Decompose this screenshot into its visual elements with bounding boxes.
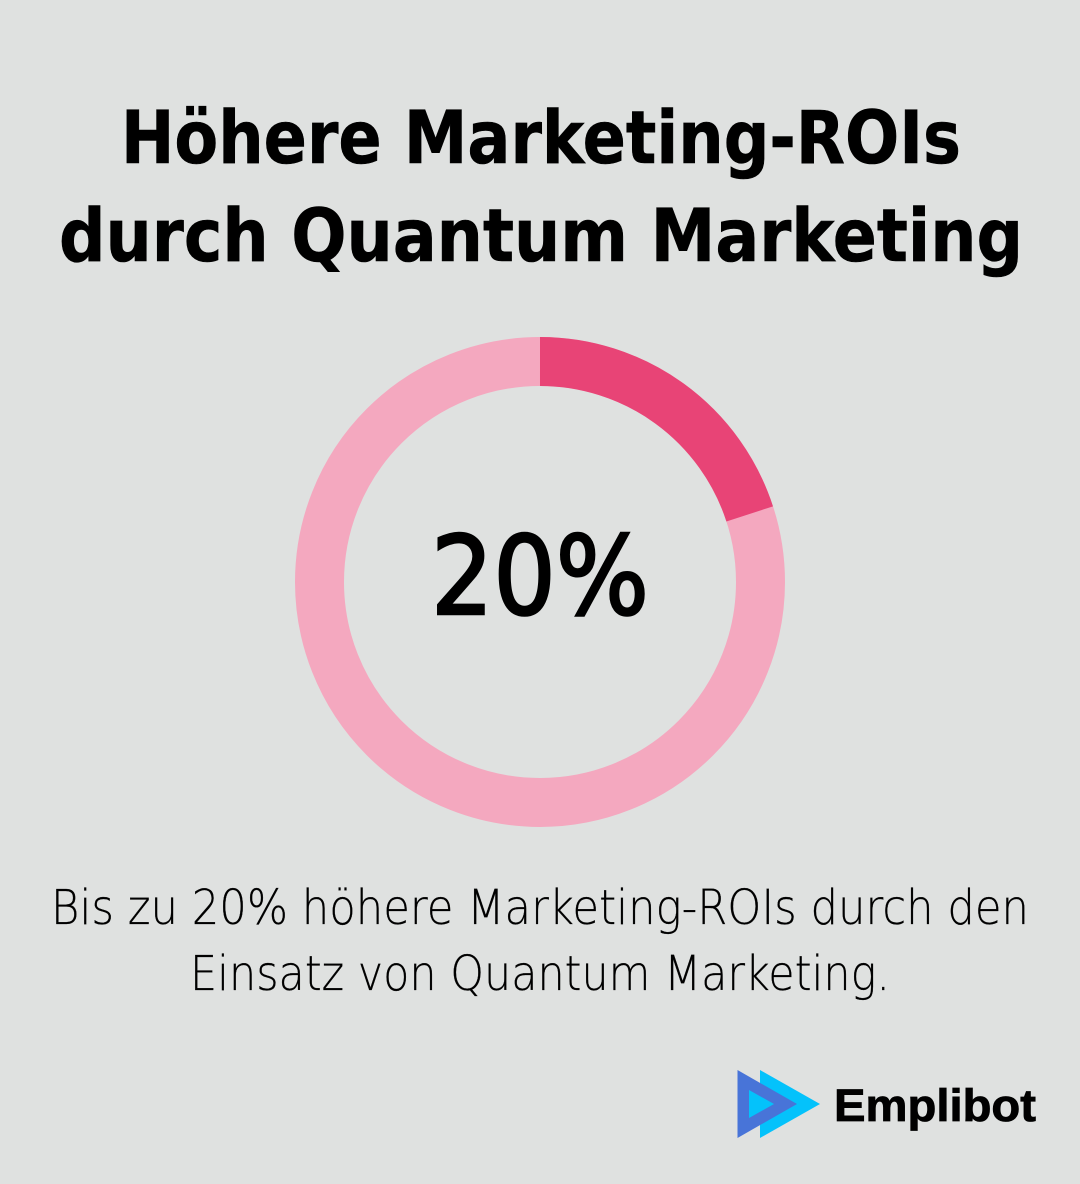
logo wordmark: Emplibot: [834, 1080, 1036, 1131]
title: Höhere Marketing-ROIs: [121, 96, 961, 181]
ring: remaining 80%: [320, 362, 760, 802]
ring: highlighted 20%: [540, 362, 750, 514]
description text: Einsatz von Quantum Marketing.: [190, 946, 890, 1002]
description text: [51, 880, 1029, 1002]
title: [59, 96, 1023, 279]
icon: play triangles: [738, 1070, 820, 1138]
donut value: 20%: [431, 513, 649, 640]
donut chart: [320, 362, 760, 802]
logo: Emplibot: [738, 1070, 1036, 1138]
